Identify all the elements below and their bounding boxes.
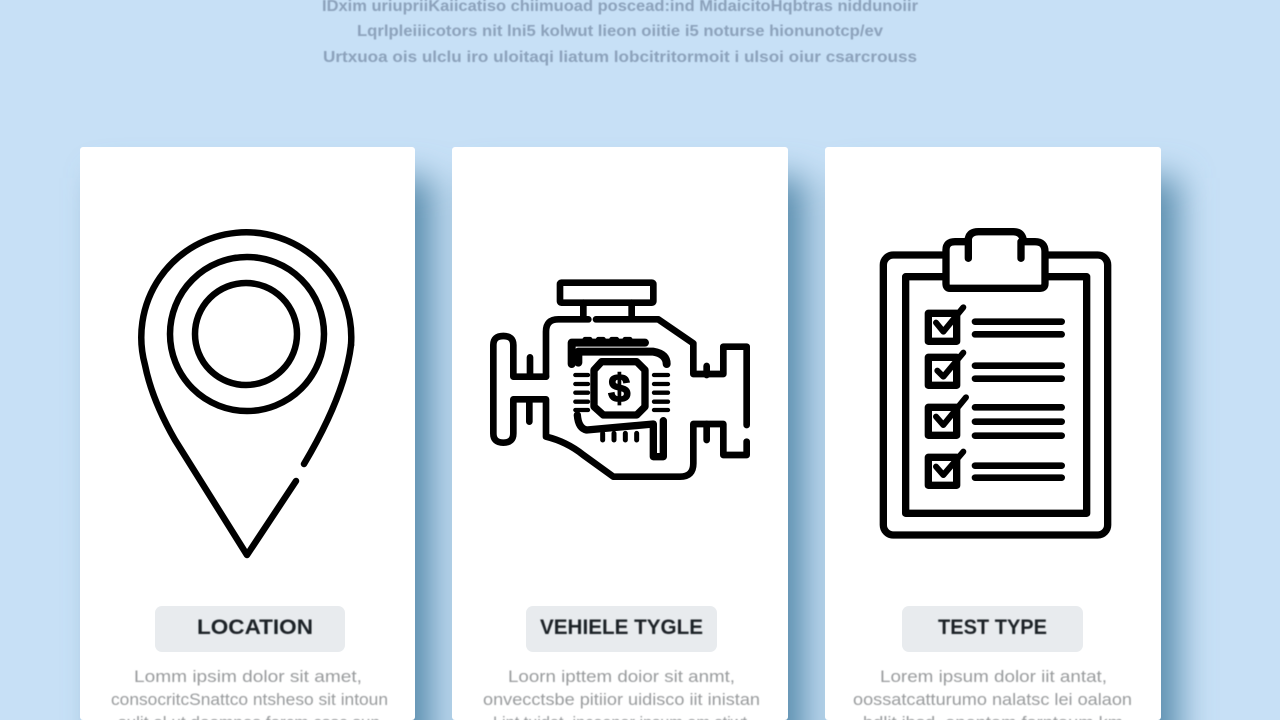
icon: engine with dollar chip: $	[608, 367, 630, 411]
icon: engine with dollar chip	[493, 283, 747, 477]
description: test type: oossatcatturumo nalatsc lei oalaon	[853, 690, 1132, 709]
description: location: consocritcSnattco ntsheso sit intoun	[111, 690, 388, 709]
label pill: test type	[902, 606, 1083, 652]
description: test type	[853, 667, 1132, 720]
description: vehicle type: Loorn ipttem doior sit anmt,	[508, 667, 735, 686]
icon: clipboard checklist	[883, 232, 1108, 535]
intro text block: Urtxuoa ois ulclu iro uloitaqi liatum lobcitritormoit i ulsoi oiur csarcrouss	[323, 49, 917, 66]
panel: test type	[825, 147, 1161, 720]
description: vehicle type	[483, 667, 760, 720]
card background	[80, 147, 415, 720]
panel: vehicle type	[452, 147, 788, 720]
card background	[452, 147, 788, 720]
panel: location	[80, 147, 415, 720]
label pill: location: LOCATION	[197, 616, 313, 639]
intro text block	[322, 0, 918, 66]
label pill: test type: TEST TYPE	[938, 616, 1047, 639]
label pill: location	[155, 606, 345, 652]
description: location	[111, 667, 388, 720]
description: location: Lomm ipsim dolor sit amet,	[134, 667, 362, 686]
description: vehicle type: onvecctsbe pitiior uidisco iit inistan	[483, 690, 760, 709]
intro text block: Lqrlpleiiicotors nit lni5 kolwut lieon oiitie i5 noturse hionunotcp/ev	[357, 23, 883, 40]
card background	[825, 147, 1161, 720]
icon: map pin	[141, 232, 351, 555]
label pill: vehicle type: VEHIELE TYGLE	[540, 616, 703, 639]
label pill: vehicle type	[526, 606, 717, 652]
card shadows	[100, 178, 1179, 720]
description: test type: Lorem ipsum dolor iit antat,	[880, 667, 1107, 686]
